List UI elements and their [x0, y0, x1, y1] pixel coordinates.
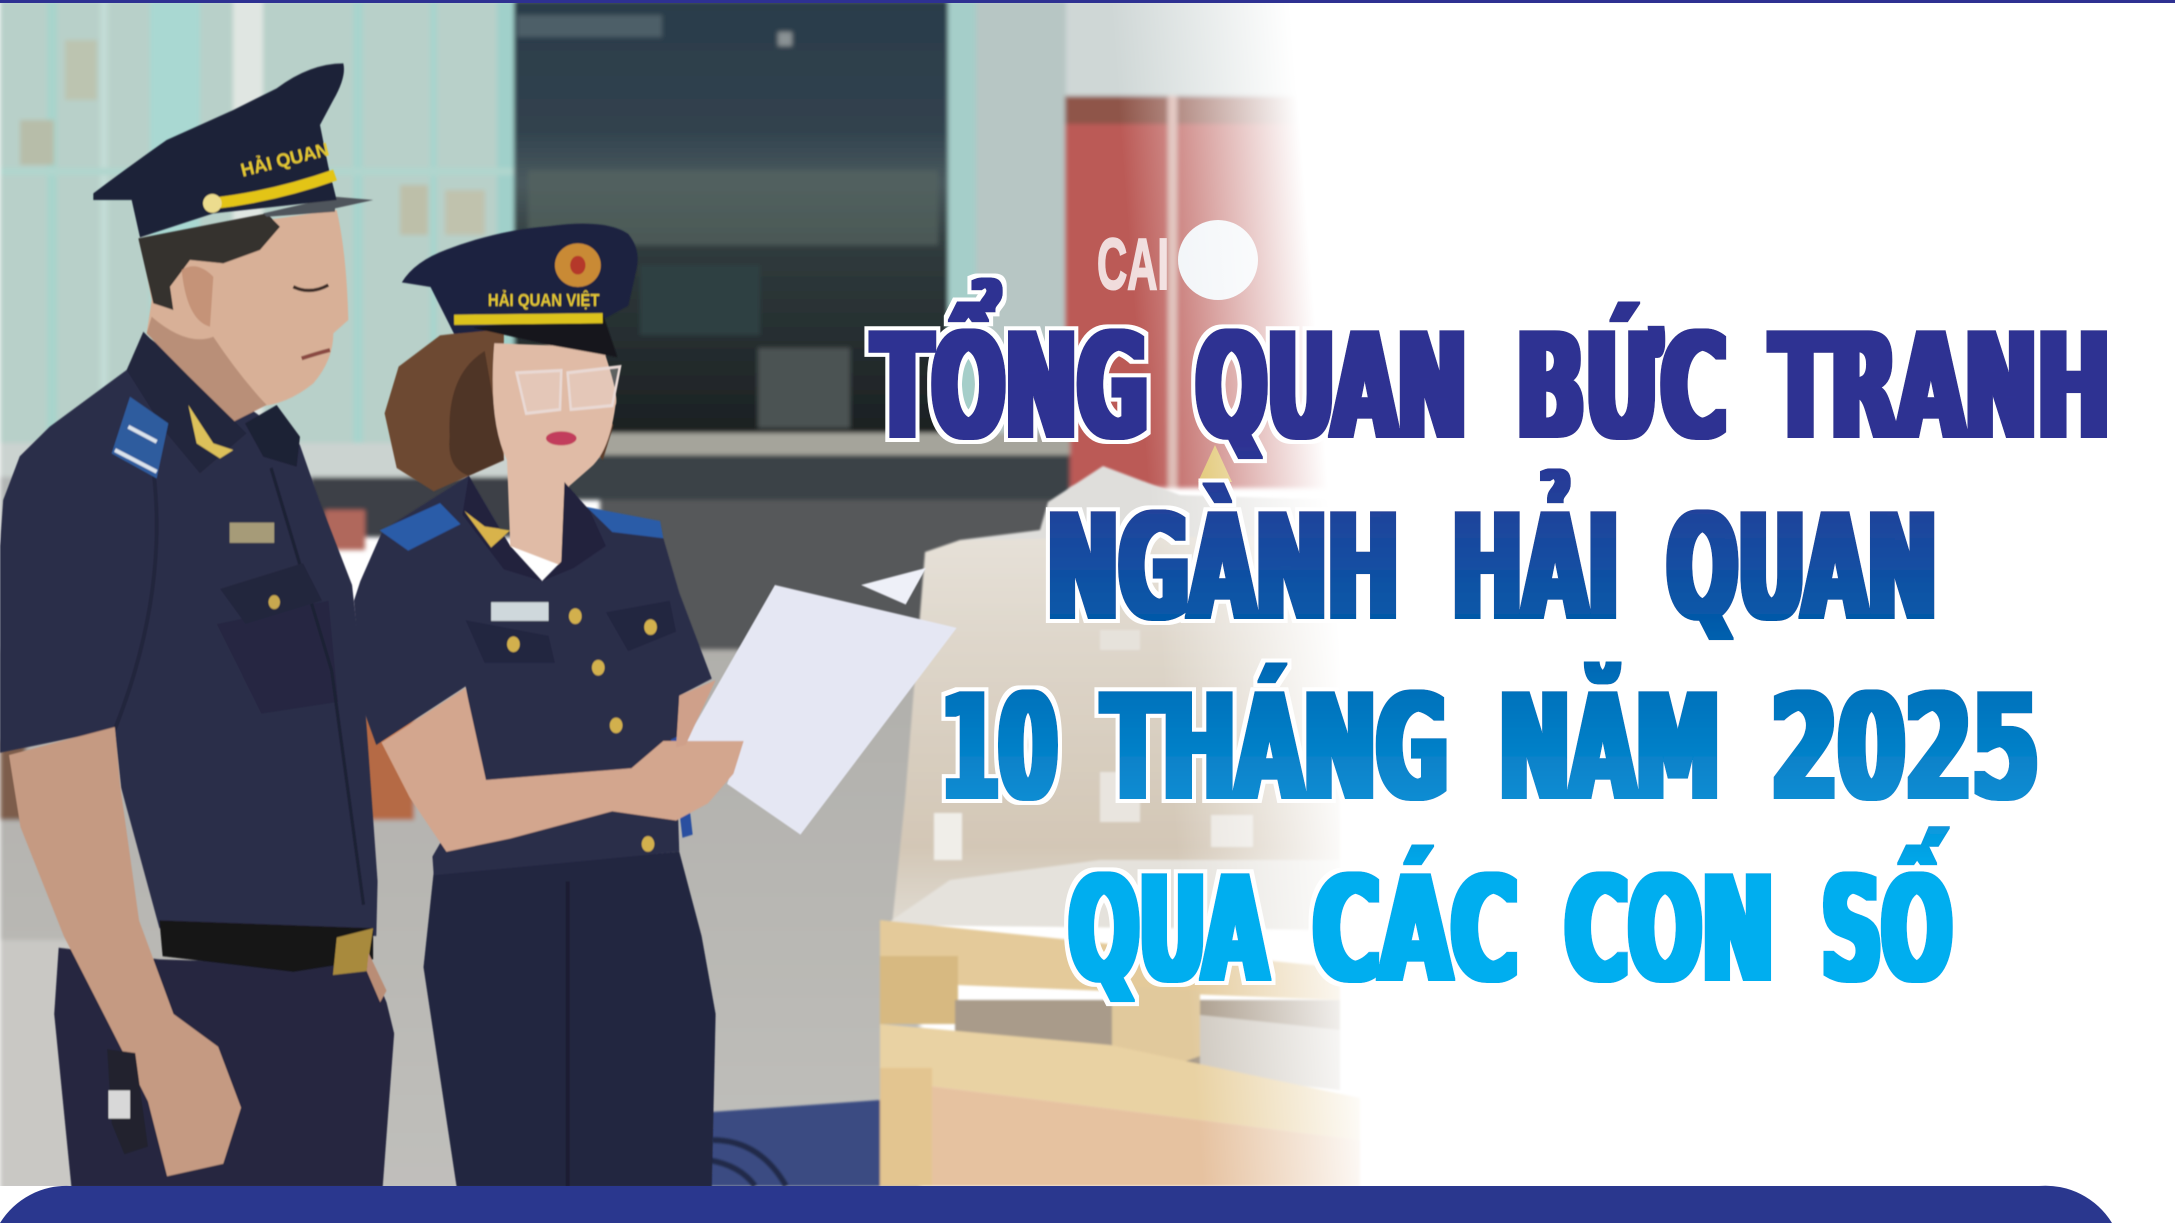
officer: woman	[354, 224, 957, 1187]
epaulette left	[379, 503, 460, 551]
title line 4: CÁC	[1313, 846, 1518, 1015]
hazard label	[1198, 445, 1232, 482]
trouser pleat	[565, 881, 571, 1187]
fade to white	[1100, 0, 1460, 1190]
officers drawn in zoomed coordinates	[0, 63, 957, 1187]
container logo circle	[1178, 220, 1258, 300]
title line 3: THÁNG	[1103, 664, 1448, 833]
officer: man	[0, 63, 394, 1187]
cap emblem	[555, 243, 601, 287]
radio	[107, 1049, 148, 1154]
left collar	[462, 476, 542, 581]
belt	[159, 920, 373, 972]
title line 1: TỔNG	[873, 278, 1148, 472]
neck shadow	[147, 317, 267, 422]
title line 3: 10	[941, 664, 1057, 833]
pocket flaps	[466, 601, 676, 663]
lower board	[880, 1024, 1360, 1140]
shirt	[0, 334, 378, 936]
hair	[138, 213, 280, 310]
pallet top board	[880, 920, 1340, 1000]
sleeve seam	[115, 468, 157, 729]
plastic wrap top	[925, 466, 1340, 570]
cap lettering: HẢI QUAN	[239, 138, 331, 181]
face and neck	[140, 210, 348, 422]
pocket flap	[220, 563, 322, 624]
paper	[686, 585, 957, 835]
lips	[546, 431, 577, 445]
right collar	[245, 405, 300, 467]
cap lettering: HẢI QUAN VIỆT	[488, 289, 600, 310]
title	[873, 278, 2110, 1015]
far forearm	[676, 680, 716, 747]
far hand	[367, 953, 387, 1002]
title line 3: 2025	[1771, 664, 2039, 833]
title line 1: QUAN	[1196, 303, 1467, 472]
name tag	[230, 523, 274, 543]
collar	[127, 332, 247, 473]
pallet gap	[955, 1000, 1340, 1090]
title line 3: NĂM	[1499, 663, 1720, 833]
cap crown	[93, 63, 344, 237]
white below photo at corners	[0, 1186, 2175, 1223]
pallet block left	[880, 956, 958, 1024]
placket	[271, 468, 364, 905]
title line 2: QUAN	[1667, 484, 1937, 653]
braid knot	[203, 194, 222, 213]
pen	[671, 735, 693, 838]
buttons	[507, 608, 657, 852]
mouth	[302, 350, 330, 358]
blue tarp	[700, 1100, 880, 1186]
right collar	[542, 482, 606, 581]
collar badge	[464, 511, 510, 548]
title line 4	[1069, 827, 1952, 1015]
cap braid	[213, 175, 335, 203]
trousers	[54, 948, 394, 1187]
plywood panel	[930, 1086, 1360, 1186]
cargo: wrapped carton on wooden pallet	[700, 466, 1360, 1186]
man head, cap and collar	[93, 63, 373, 478]
trousers	[423, 852, 716, 1187]
title line 4: CON	[1565, 846, 1774, 1015]
carton	[892, 535, 1340, 925]
epaulette	[112, 397, 168, 478]
pallet post	[880, 1068, 932, 1186]
title line 1: BỨC	[1516, 303, 1727, 472]
cap visor	[263, 197, 373, 217]
title line 2: NGÀNH	[1047, 484, 1399, 653]
shirt	[354, 476, 712, 875]
top rule	[0, 0, 2175, 3]
arm and hand	[381, 688, 744, 852]
hair shadow	[449, 351, 504, 476]
shirt shade	[217, 601, 338, 714]
epaulette pips	[115, 427, 157, 472]
glasses	[517, 367, 620, 413]
buckle	[333, 928, 373, 975]
name tag	[491, 602, 549, 621]
photo background: warehouse building and yard	[0, 0, 1400, 1190]
brow and eye	[293, 285, 328, 290]
cap braid	[454, 318, 603, 320]
bottom navy panel	[0, 1186, 2112, 1223]
title line 4: QUA	[1069, 846, 1267, 1015]
title line 1	[873, 278, 2110, 472]
ear	[182, 266, 213, 327]
arm and hand	[9, 727, 241, 1176]
hair	[385, 328, 504, 491]
title line 4: SỐ	[1822, 827, 1952, 1015]
cap visor	[472, 314, 617, 357]
far hair	[590, 406, 614, 460]
pallet block centre	[1112, 985, 1200, 1066]
epaulette right	[587, 507, 663, 538]
paper corner	[861, 568, 926, 604]
title line 2: HẢI	[1452, 470, 1619, 653]
cap crown	[402, 224, 638, 334]
title line 3	[941, 663, 2039, 833]
buttons	[269, 595, 280, 609]
title line 2	[1047, 470, 1937, 653]
collar badge	[188, 405, 233, 458]
container logo lettering: CAI	[1097, 225, 1169, 305]
neck and face	[493, 343, 616, 566]
